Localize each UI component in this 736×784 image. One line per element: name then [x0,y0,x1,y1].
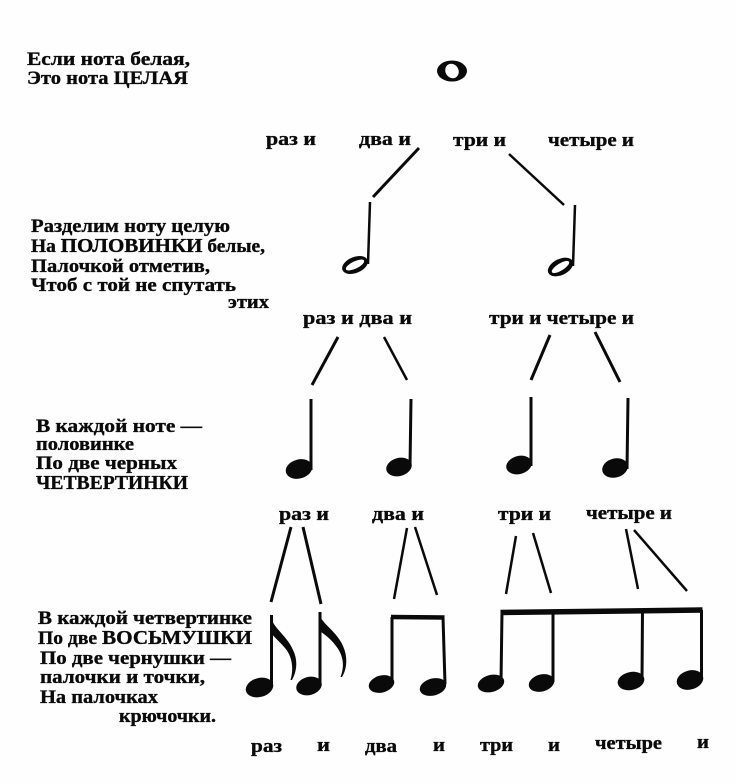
counting row: four beats: три и [453,131,506,151]
verse: quarter notes [36,417,203,494]
verse: eighth notes: По две ВОСЬМУШКИ [38,627,252,649]
icon: four quarter notes [284,397,630,482]
verse: whole note: Если нота белая, [27,50,190,70]
icon: beamed eighth notes pair [367,617,448,699]
counting row: eighth notes: и [317,736,330,756]
arrows: quarter notes to eighth notes [271,527,687,604]
counting row: quarter notes [279,504,672,525]
verse: eighth notes: На палочках [40,688,159,708]
verse: half notes: этих [228,293,270,313]
verse: whole note: Это нота ЦЕЛАЯ [27,69,189,89]
icon: whole note [437,60,467,82]
verse: quarter notes: ЧЕТВЕРТИНКИ [36,472,188,494]
counting row: quarter notes: два и [372,505,424,525]
counting row: eighth notes: и [548,736,560,756]
icon: flagged eighth note two [294,612,346,698]
counting row: quarter notes: три и [498,505,551,525]
counting row: half notes [303,309,634,329]
arrows: half notes to quarter notes [312,332,620,385]
verse: eighth notes: По две чернушки — [40,649,232,669]
counting row: half notes: три и четыре и [489,309,634,329]
verse: eighth notes [38,609,252,727]
counting row: eighth notes: три [480,736,513,756]
counting row: quarter notes: четыре и [586,504,672,524]
arrows: whole note to half notes [373,148,564,205]
counting row: eighth notes: раз [251,737,282,757]
verse: eighth notes: В каждой четвертинке [38,609,252,629]
verse: quarter notes: половинке [36,435,134,455]
verse: whole note [27,50,190,89]
counting row: quarter notes: раз и [279,505,329,525]
counting row: half notes: раз и два и [303,309,412,329]
counting row: four beats: четыре и [548,131,634,151]
counting row: four beats: два и [359,130,411,150]
counting row: eighth notes: и [697,733,709,753]
counting row: eighth notes: четыре [595,734,662,754]
counting row: eighth notes: и [433,736,445,756]
counting row: eighth notes: два [365,737,397,757]
icon: half note left [339,202,371,277]
verse: half notes: Чтоб с той не спутать [31,276,236,296]
verse: quarter notes: По две черных [36,454,178,474]
icon: half note right [545,205,576,280]
counting row: four beats: раз и [266,130,316,150]
verse: half notes: Палочкой отметив, [31,257,210,277]
counting row: four beats [266,130,634,151]
icon: flagged eighth note one [244,614,296,700]
counting row: eighth notes [251,733,709,757]
verse: eighth notes: крючочки. [119,707,216,727]
verse: quarter notes: В каждой ноте — [36,417,203,437]
verse: half notes: На ПОЛОВИНКИ белые, [31,235,265,257]
verse: half notes [31,217,270,313]
verse: half notes: Разделим ноту целую [31,217,230,237]
icon: beamed eighth notes group of four [476,610,705,695]
verse: eighth notes: палочки и точки, [40,668,205,688]
